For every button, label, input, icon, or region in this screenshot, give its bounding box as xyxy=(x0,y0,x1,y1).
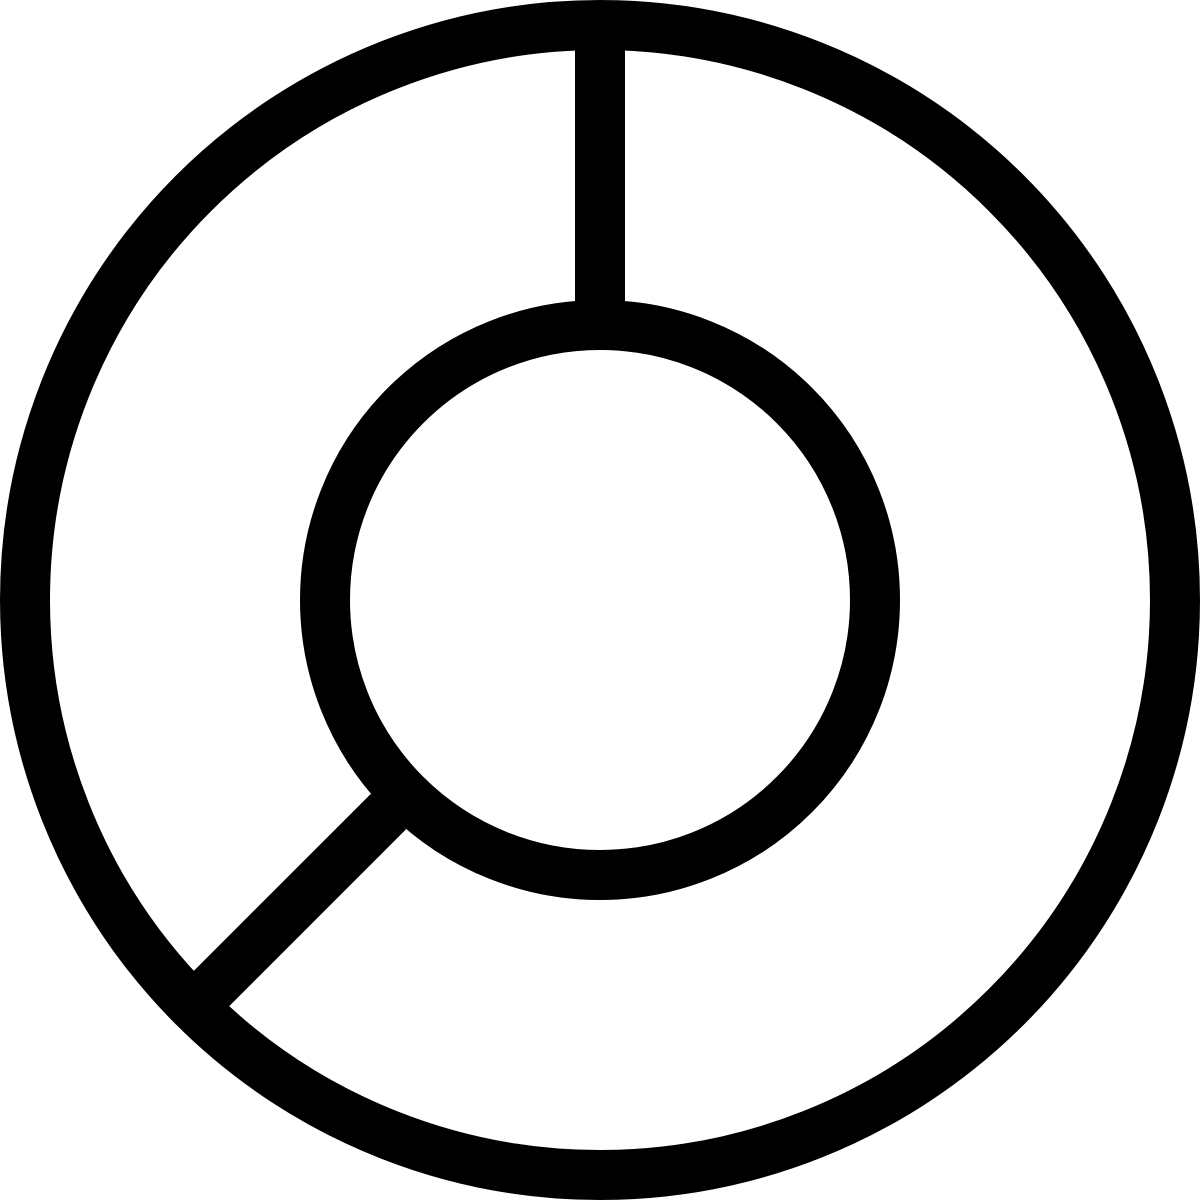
top divider xyxy=(575,25,625,325)
lower-left divider xyxy=(193,812,388,1007)
inner ring xyxy=(325,325,875,875)
